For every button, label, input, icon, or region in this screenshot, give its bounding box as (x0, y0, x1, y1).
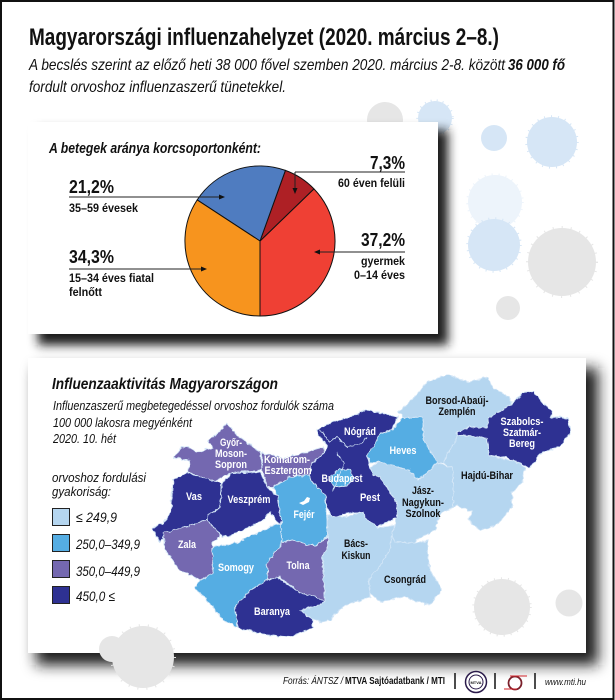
logo: MTVA: MTVA (470, 680, 482, 685)
county: Heves (367, 417, 437, 478)
Nógrád-Pest border (320, 430, 367, 492)
legend: gyakoriság: (52, 484, 111, 499)
source line: Forrás: ÁNTSZ / (283, 674, 344, 687)
county: Baranya (235, 577, 325, 637)
label: 37,2%: 0–14 éves (354, 268, 405, 282)
label: 7,3% (292, 153, 405, 194)
county: Somogy (195, 523, 282, 628)
county labels: Bereg (509, 438, 535, 450)
website: www.mti.hu (545, 677, 587, 688)
virus decoration blobs (367, 100, 596, 320)
map description: 2020. 10. hét (52, 431, 117, 446)
county labels: Bács- (344, 538, 368, 550)
map description: Influenzaszerű megbetegedéssel orvoshoz fordulók száma (53, 398, 334, 413)
label: 37,2%: gyermek (361, 254, 405, 268)
label: 21,2%: 35–59 évesek (69, 201, 138, 215)
county labels: Békés (444, 532, 470, 544)
title: Magyarországi influenzahelyzet (2020. március 2–8.) (29, 24, 499, 51)
label: 34,3%: 34,3% (69, 247, 114, 267)
legend: 250,0–349,9 (75, 536, 140, 552)
county labels: Zala (178, 539, 197, 551)
lower virus decoration blobs (99, 578, 582, 688)
county labels: Esztergom (264, 465, 312, 477)
county: Tolna (267, 537, 328, 602)
map of Hungary (152, 374, 570, 637)
county labels: Komárom- (264, 454, 310, 466)
county labels: Fejér (294, 509, 315, 521)
county: Csongrád (368, 535, 442, 605)
county labels: Borsod-Abaúj- (426, 395, 489, 407)
county: Komárom-Esztergom (262, 447, 325, 487)
panel: influenza activity map (28, 358, 598, 665)
logo: MTVA (466, 672, 486, 692)
label: 34,3% (69, 247, 207, 299)
footer separators (455, 673, 535, 689)
label: 21,2%: 21,2% (69, 177, 114, 197)
county labels: Tolna (286, 560, 310, 572)
county: Zala (163, 520, 220, 580)
county labels: Szatmár- (503, 427, 541, 439)
county labels: Nógrád (344, 426, 376, 438)
label: 37,2% (314, 230, 405, 282)
county labels: Baranya (254, 606, 291, 618)
label: 37,2%: 37,2% (361, 230, 405, 250)
lake Velence (299, 497, 310, 505)
label: 7,3%: 7,3% (370, 153, 405, 173)
county: Borsod-Abaúj-Zemplén (398, 374, 512, 463)
intro text: A becslés szerint az előző heti 38 000 fővel szemben 2020. március 2-8. között (28, 57, 505, 74)
county: Fejér (273, 475, 327, 545)
county labels: Szabolcs- (500, 416, 544, 428)
county labels: Kiskun (342, 550, 371, 562)
county shapes (152, 374, 570, 637)
county labels: Vas (186, 491, 202, 503)
map description: 100 000 lakosra megyénként (53, 415, 193, 430)
county labels: Somogy (218, 562, 255, 574)
county: Budapest (330, 469, 354, 487)
county labels: Csongrád (384, 574, 426, 586)
county labels: Győr- (220, 437, 242, 449)
county labels: Hajdú-Bihar (461, 470, 514, 482)
legend: 350,0–449,9 (76, 563, 140, 579)
county labels: Veszprém (228, 494, 271, 506)
legend (52, 470, 147, 604)
intro text (28, 57, 566, 96)
county labels: Nagykun- (402, 497, 444, 509)
county: Bács-Kiskun (300, 512, 395, 622)
county: Vas (152, 473, 222, 543)
label: 7,3%: 60 éven felüli (338, 176, 405, 190)
pie chart (185, 166, 335, 316)
county labels: Zemplén (438, 406, 476, 418)
map description (52, 398, 334, 446)
intro text: 36 000 fő (508, 57, 566, 74)
panel: age groups (28, 122, 448, 345)
county: Hajdú-Bihar (443, 435, 525, 530)
county labels: Szolnok (406, 508, 441, 520)
intro text: fordult orvoshoz influenzaszerű tünetekkel. (29, 79, 286, 96)
legend: 450,0 ≤ (76, 588, 115, 604)
county labels: Jász- (412, 485, 434, 497)
label: 21,2% (69, 177, 225, 215)
map heading: Influenzaaktivitás Magyarországon (52, 376, 278, 393)
logo: MTI (504, 676, 527, 690)
county labels: Pest (360, 492, 380, 504)
legend: orvoshoz fordulási (52, 470, 147, 485)
county labels: Moson- (215, 448, 247, 460)
legend: ≤ 249,9 (76, 509, 117, 525)
source line (283, 674, 445, 687)
county labels: Sopron (215, 459, 247, 471)
county labels: Heves (390, 445, 416, 457)
county labels (178, 395, 544, 618)
county: Veszprém (207, 472, 283, 537)
county labels: Budapest (322, 473, 363, 485)
county: Jász-Nagykun-Szolnok (370, 462, 453, 543)
source line: MTVA Sajtóadatbank / MTI (345, 676, 445, 687)
county: Szabolcs-Szatmár-Bereg (457, 392, 570, 468)
label: 34,3%: felnőtt (69, 285, 102, 299)
county: Győr-Moson-Sopron (173, 423, 262, 482)
counties: Nógrád and Pest (310, 410, 398, 527)
label: 34,3%: 15–34 éves fiatal (69, 271, 154, 285)
panel heading: A betegek aránya korcsoportonként: (48, 141, 261, 157)
